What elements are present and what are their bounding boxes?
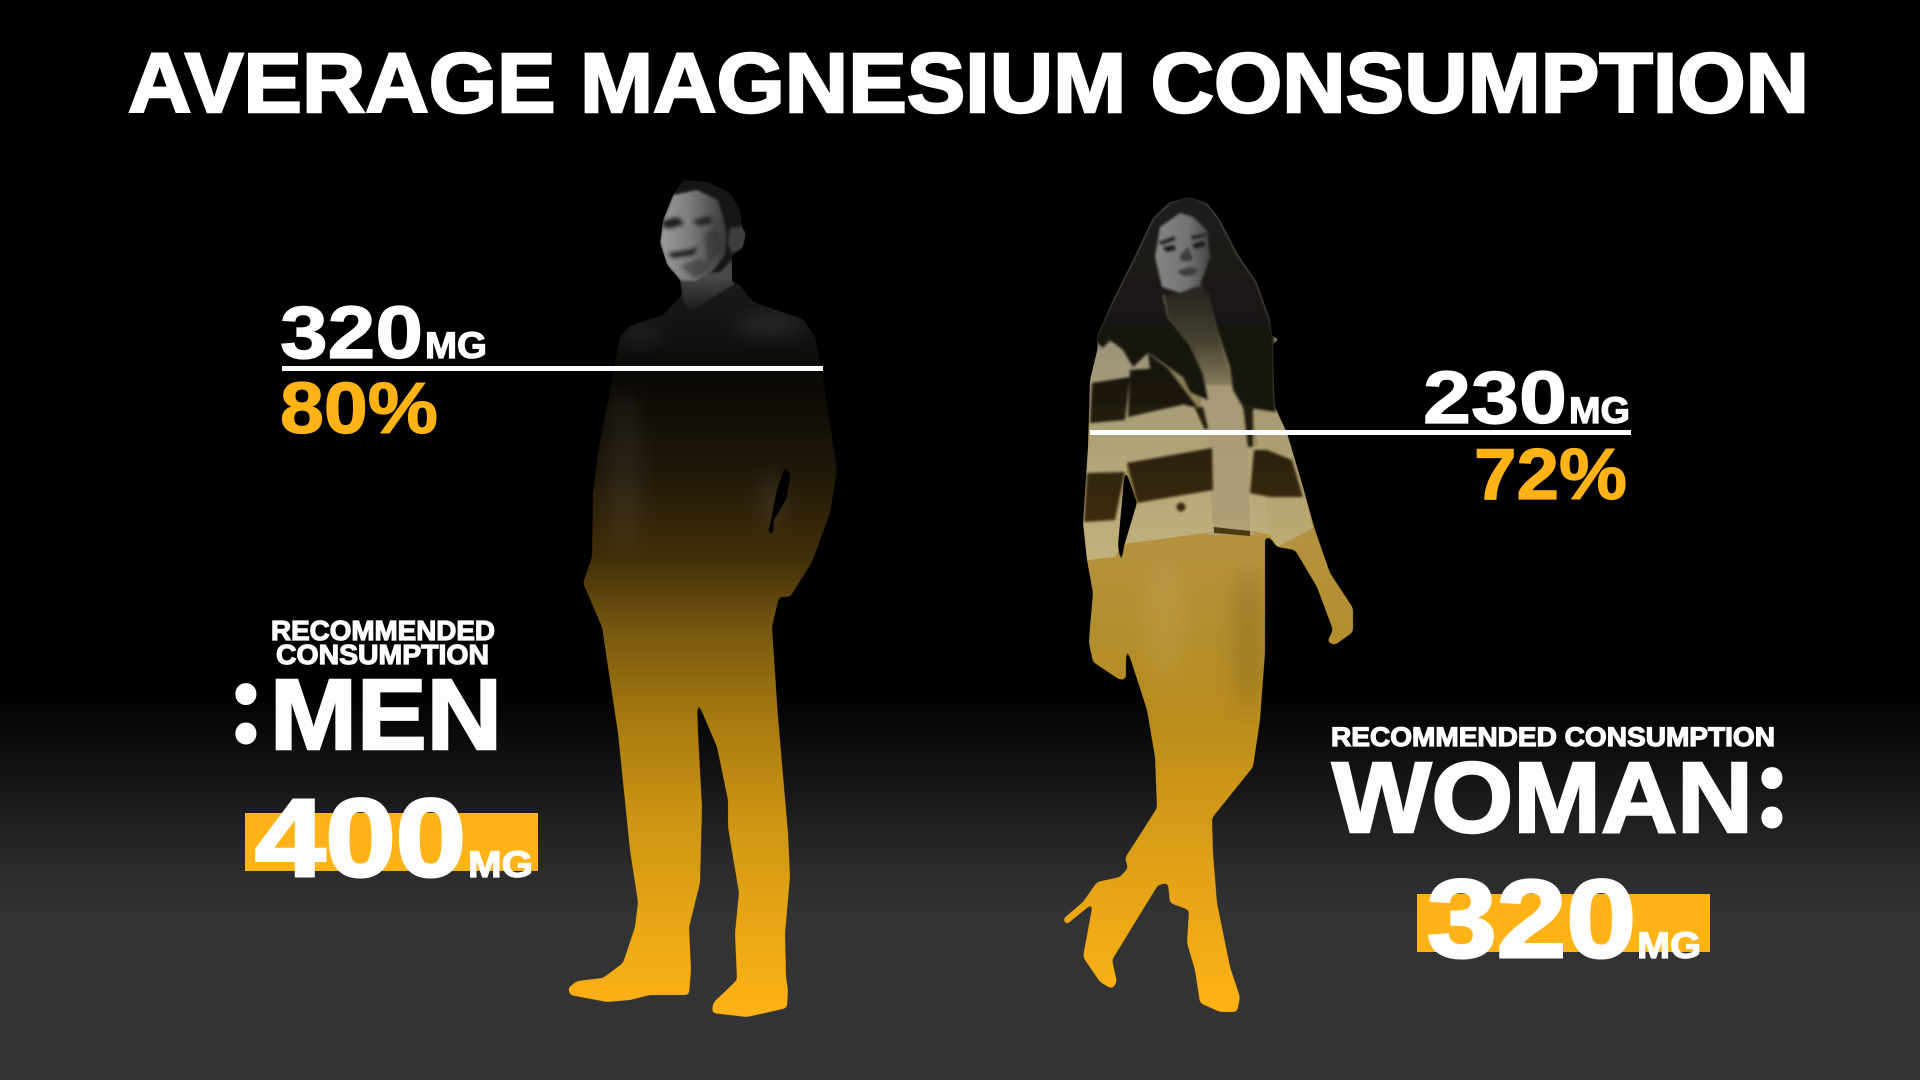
suit highlights [607, 316, 805, 550]
women: intake label: MG [1569, 390, 1630, 431]
women: intake percentage: 72% [1474, 435, 1627, 515]
skirt shading [1150, 572, 1265, 705]
men: recommended heading: : [229, 621, 263, 772]
women: intake label [1423, 356, 1630, 439]
women: recommended heading: : [1755, 705, 1789, 856]
women: recommended value: MG [1637, 925, 1701, 966]
men: recommended value: MG [468, 844, 533, 885]
figure: woman silhouette [1064, 198, 1354, 1012]
women: recommended heading: WOMAN [1332, 742, 1753, 854]
women: recommended heading [1331, 705, 1789, 856]
men: intake label: MG [425, 325, 487, 366]
men: intake level line [282, 366, 823, 371]
head and neck [660, 189, 746, 310]
shirt [1200, 380, 1255, 535]
neck and chest [1163, 285, 1233, 385]
men: recommended value: 400 [255, 777, 466, 900]
women: recommended heading: RECOMMENDED CONSUMPTION [1331, 722, 1775, 752]
men: intake label: 320 [280, 291, 423, 374]
figure: man silhouette [568, 180, 837, 1017]
men: recommended heading [229, 615, 502, 772]
women: intake level line [1090, 430, 1631, 435]
jacket light panels [1083, 340, 1313, 560]
hair [1094, 195, 1276, 412]
men: recommended heading: CONSUMPTION [276, 639, 489, 670]
men: recommended heading: MEN [270, 659, 502, 771]
face [1155, 213, 1210, 293]
women: recommended value: 320 [1427, 858, 1636, 981]
men: recommended value [245, 777, 538, 900]
belt [1214, 527, 1250, 536]
men: intake percentage: 80% [280, 369, 438, 449]
men: recommended heading: RECOMMENDED [271, 615, 495, 646]
jacket dark stripes [1084, 353, 1303, 522]
women: intake label: 230 [1423, 356, 1567, 439]
women: recommended value [1417, 858, 1710, 981]
men: intake label [280, 291, 487, 374]
title: AVERAGE MAGNESIUM CONSUMPTION [128, 36, 1809, 130]
